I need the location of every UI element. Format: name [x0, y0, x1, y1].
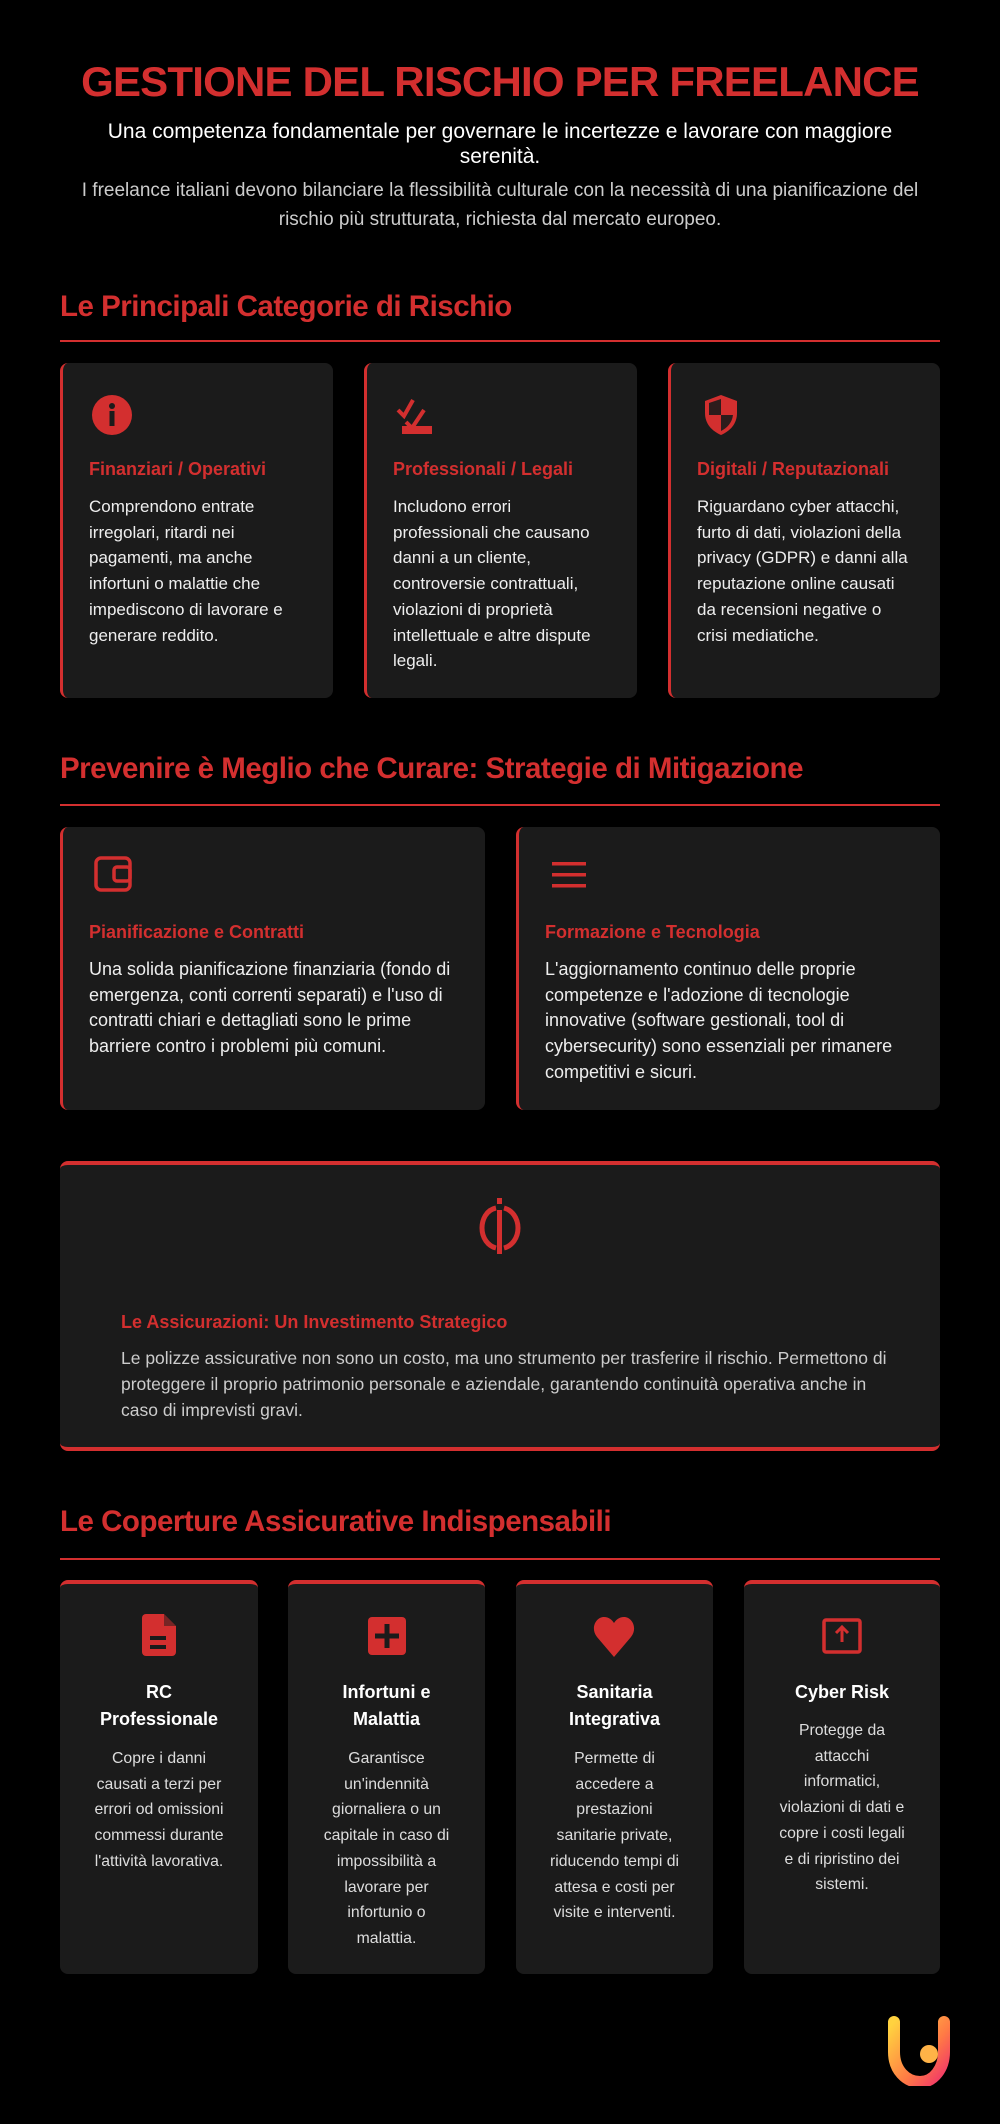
- card text: Copre i danni: [112, 1750, 206, 1767]
- card text: commessi durante: [94, 1827, 224, 1844]
- card title: Finanziari / Operativi: [89, 459, 266, 479]
- card text: Protegge da: [799, 1722, 885, 1739]
- card title: [569, 1682, 660, 1729]
- card text: Includono errori: [393, 497, 511, 516]
- icon: checks: [396, 399, 432, 434]
- card text: lavorare per: [344, 1879, 429, 1896]
- card text: l'attività lavorativa.: [95, 1853, 223, 1870]
- card text: barriere contro i problemi più comuni.: [89, 1036, 386, 1056]
- subtitle: serenità.: [460, 145, 540, 168]
- subtitle: Una competenza fondamentale per governare le incertezze e lavorare con maggiore: [108, 120, 892, 143]
- card text: controversie contrattuali,: [393, 574, 578, 593]
- card title: Integrativa: [569, 1709, 660, 1729]
- box text: Le polizze assicurative non sono un costo, ma uno strumento per trasferire il rischio. Permettono di: [121, 1348, 887, 1368]
- card text: legali.: [393, 651, 437, 670]
- card text: riducendo tempi di: [550, 1853, 679, 1870]
- card title: Digitali / Reputazionali: [697, 459, 889, 479]
- card text: competitivi e sicuri.: [545, 1062, 697, 1082]
- card text: [94, 1750, 224, 1870]
- card text: competenze e l'adozione di tecnologie: [545, 985, 850, 1005]
- icon: medical plus: [368, 1617, 406, 1655]
- card text: errori od omissioni: [94, 1801, 224, 1818]
- icon: insurance: [480, 1198, 520, 1254]
- card text: innovative (software gestionali, tool di: [545, 1010, 844, 1030]
- card text: [89, 959, 450, 1056]
- card text: giornaliera o un: [332, 1801, 441, 1818]
- card text: da recensioni negative o: [697, 600, 881, 619]
- card text: reputazione online causati: [697, 574, 895, 593]
- card text: infortunio o: [347, 1904, 426, 1921]
- heading: mitigazione: Prevenire è Meglio che Curare: Strategie di Mitigazione: [60, 752, 803, 785]
- icon: upload box: [822, 1618, 862, 1654]
- panel: digitali: [668, 363, 940, 698]
- card text: [324, 1750, 449, 1947]
- card text: [779, 1722, 905, 1893]
- intro text: I freelance italiani devono bilanciare la flessibilità culturale con la necessità di una pianificazione del: [82, 180, 918, 201]
- card text: furto di dati, violazioni della: [697, 523, 901, 542]
- card text: professionali che causano: [393, 523, 590, 542]
- card text: [393, 497, 591, 670]
- card text: Riguardano cyber attacchi,: [697, 497, 899, 516]
- card title: Professionale: [100, 1709, 218, 1729]
- card text: impediscono di lavorare e: [89, 600, 283, 619]
- card text: [697, 497, 908, 645]
- panel: rc professionale: [60, 1580, 258, 1974]
- card text: cybersecurity) sono essenziali per rimanere: [545, 1036, 892, 1056]
- subtitle: [108, 120, 892, 168]
- icon: heart: [594, 1617, 634, 1657]
- card title: Infortuni e: [342, 1682, 430, 1702]
- card text: privacy (GDPR) e danni alla: [697, 548, 908, 567]
- heading: coperture: Le Coperture Assicurative Indispensabili: [60, 1505, 611, 1538]
- card text: [545, 959, 892, 1082]
- card title: Formazione e Tecnologia: [545, 922, 760, 942]
- panel: sanitaria: [516, 1580, 713, 1974]
- card text: causati a terzi per: [97, 1776, 221, 1793]
- panel: pianificazione: [60, 827, 485, 1110]
- panel: infortuni: [288, 1580, 485, 1974]
- box text: [121, 1348, 887, 1420]
- icon: menu: [552, 862, 586, 888]
- card title: Cyber Risk: [795, 1682, 889, 1702]
- card text: malattia.: [357, 1930, 416, 1947]
- card title: Malattia: [353, 1709, 420, 1729]
- card title: Professionali / Legali: [393, 459, 573, 479]
- icon: wallet: [94, 856, 132, 892]
- panel: finanziari: [60, 363, 333, 698]
- card text: crisi mediatiche.: [697, 626, 819, 645]
- card text: sistemi.: [815, 1876, 869, 1893]
- panel: cyber risk: [744, 1580, 940, 1974]
- card title: [342, 1682, 430, 1729]
- card text: intellettuale e altre dispute: [393, 626, 591, 645]
- card text: emergenza, conti correnti separati) e l'uso di: [89, 985, 443, 1005]
- card title: [100, 1682, 218, 1729]
- card title: RC: [146, 1682, 172, 1702]
- card text: copre i costi legali: [779, 1825, 905, 1842]
- card text: informatici,: [804, 1773, 880, 1790]
- card text: attesa e costi per: [554, 1879, 675, 1896]
- heading: categorie di rischio: Le Principali Categorie di Rischio: [60, 290, 512, 323]
- card text: contratti chiari e dettagliati sono le prime: [89, 1010, 411, 1030]
- card text: generare reddito.: [89, 626, 218, 645]
- panel: assicurazioni: [60, 1161, 940, 1451]
- card title: Sanitaria: [576, 1682, 653, 1702]
- card text: Una solida pianificazione finanziaria (fondo di: [89, 959, 450, 979]
- title: GESTIONE DEL RISCHIO PER FREELANCE: [81, 58, 919, 105]
- card title: Pianificazione e Contratti: [89, 922, 304, 942]
- card text: [89, 497, 283, 645]
- box text: caso di imprevisti gravi.: [121, 1400, 303, 1420]
- card text: violazioni di proprietà: [393, 600, 553, 619]
- intro text: rischio più strutturata, richiesta dal mercato europeo.: [279, 209, 721, 230]
- card text: un'indennità: [344, 1776, 429, 1793]
- card text: sanitarie private,: [557, 1827, 672, 1844]
- panel: professionali: [364, 363, 637, 698]
- card text: impossibilità a: [337, 1853, 436, 1870]
- intro text: [82, 180, 918, 230]
- card text: Permette di: [574, 1750, 655, 1767]
- box text: proteggere il proprio patrimonio personale e aziendale, garantendo continuità operativa anche in: [121, 1374, 866, 1394]
- panel: formazione: [516, 827, 940, 1110]
- card text: Comprendono entrate: [89, 497, 254, 516]
- icon: shield: [705, 395, 737, 435]
- card text: e di ripristino dei: [784, 1851, 900, 1868]
- card text: [550, 1750, 679, 1921]
- card text: visite e interventi.: [553, 1904, 676, 1921]
- card text: irregolari, ritardi nei: [89, 523, 234, 542]
- card text: pagamenti, ma anche: [89, 548, 252, 567]
- card text: L'aggiornamento continuo delle proprie: [545, 959, 856, 979]
- card text: danni a un cliente,: [393, 548, 531, 567]
- card text: capitale in caso di: [324, 1827, 449, 1844]
- card text: accedere a: [575, 1776, 654, 1793]
- icon: info: [92, 395, 132, 435]
- card text: Garantisce: [348, 1750, 425, 1767]
- card text: violazioni di dati e: [780, 1799, 904, 1816]
- card text: prestazioni: [576, 1801, 653, 1818]
- icon: document: [142, 1614, 176, 1656]
- box title: Le Assicurazioni: Un Investimento Strategico: [121, 1312, 507, 1332]
- card text: attacchi: [815, 1748, 869, 1765]
- card text: infortuni o malattie che: [89, 574, 260, 593]
- logo: [888, 2016, 950, 2086]
